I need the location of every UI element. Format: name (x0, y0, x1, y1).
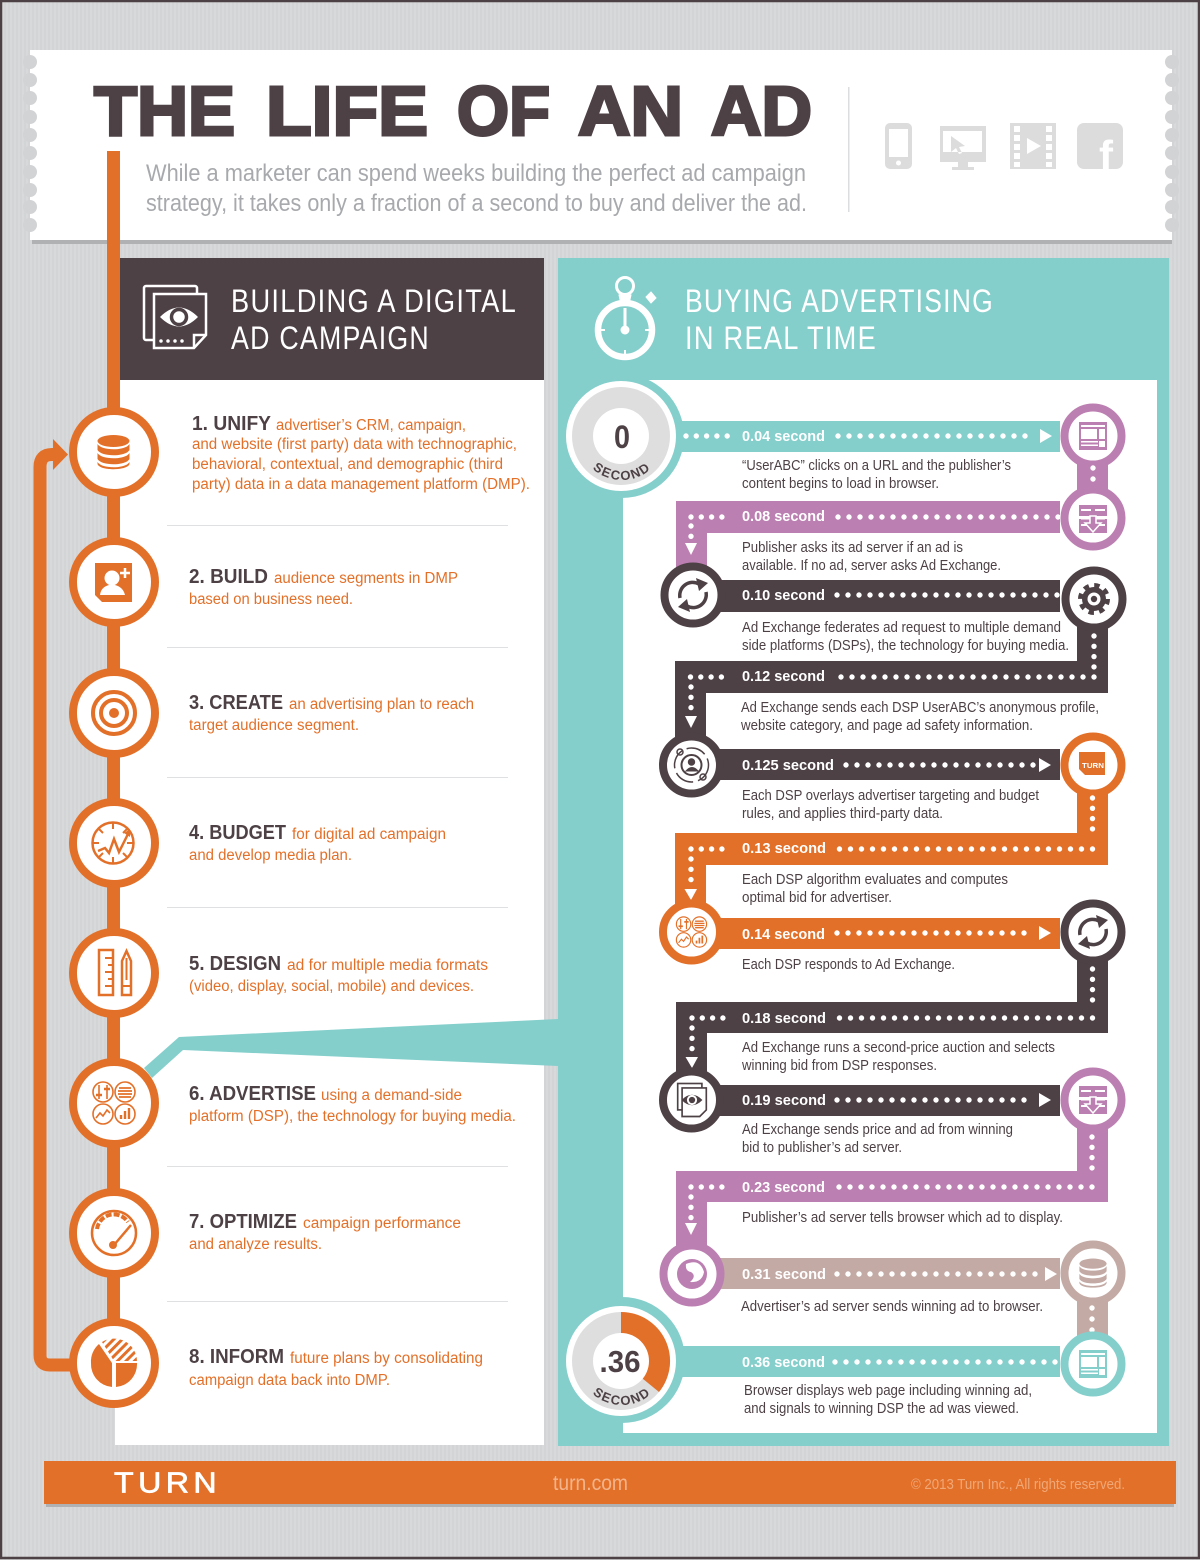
step 6 text (189, 1082, 516, 1125)
right panel: buying advertising in real time (558, 258, 1169, 1446)
step 1 text: party) data in a data management platform (DMP). (192, 476, 530, 493)
node: gear icon (1066, 570, 1122, 628)
step 0.18 second: winning bid from DSP responses. (741, 1058, 937, 1074)
step 0.13 second (684, 798, 1092, 906)
step 2 build (73, 541, 458, 623)
step 5 design (73, 932, 488, 1014)
footer logo: TURN (114, 1468, 221, 1500)
footer bar (44, 1461, 1176, 1507)
step 0.10 second (742, 587, 1069, 654)
step 2 text: based on business need. (189, 591, 353, 608)
title: THE (94, 72, 235, 150)
start clock: 0 second (566, 380, 682, 498)
end clock: .36 second: .36 (600, 1344, 640, 1379)
step 2 text (189, 565, 458, 608)
title: AD (711, 72, 812, 150)
step 8 text (189, 1345, 483, 1389)
step 0.04 second (686, 428, 1052, 492)
step 0.23 second: 0.23 second (742, 1179, 825, 1196)
node: web page with ad icon (1064, 1336, 1122, 1392)
node: ad server database icon (1064, 1244, 1122, 1331)
step 2 text: audience segments in DMP (274, 570, 458, 587)
step 4 budget (73, 802, 446, 884)
icon: database (73, 411, 155, 493)
step 0.08 second: Publisher asks its ad server if an ad is (742, 540, 963, 556)
step 1 text: and website (first party) data with technographic, (192, 436, 517, 453)
step 5 text (189, 952, 488, 995)
icon: target (73, 672, 155, 754)
step 7 optimize (73, 1192, 461, 1274)
timeline spine (107, 151, 120, 1363)
step 0.10 second: Ad Exchange federates ad request to multiple demand (742, 620, 1061, 636)
step 0.08 second: 0.08 second (742, 508, 825, 525)
step 8 text: campaign data back into DMP. (189, 1372, 390, 1389)
left panel: building a digital ad campaign (115, 258, 544, 1445)
end clock: .36 second: SECOND (594, 1388, 648, 1405)
header banner (23, 50, 1179, 244)
left panel heading: AD CAMPAIGN (231, 320, 430, 356)
node: ad server layout icon (1064, 1072, 1122, 1128)
step 0.14 second: Each DSP responds to Ad Exchange. (742, 957, 955, 973)
step 0.31 second: 0.31 second (742, 1266, 826, 1283)
end clock: .36 second (566, 1297, 684, 1423)
node: publisher page icon (1064, 408, 1122, 480)
footer url: turn.com (553, 1472, 628, 1495)
step 1 text (192, 412, 530, 493)
subtitle (146, 160, 807, 217)
step 3 text (189, 691, 474, 734)
media icons: phone, monitor, video, facebook (885, 123, 1123, 179)
icon: clock with chart line (73, 802, 155, 884)
node: DSP dashboard icon (663, 904, 720, 960)
step 0.13 second: optimal bid for advertiser. (742, 890, 892, 906)
step 0.08 second (685, 508, 1060, 574)
step 4 text: and develop media plan. (189, 847, 352, 864)
node: browser logo (664, 1246, 720, 1302)
step 5 text: (video, display, social, mobile) and devices. (189, 978, 474, 995)
step 8 inform (73, 1322, 483, 1404)
step 0.19 second: Ad Exchange sends price and ad from winning (742, 1122, 1013, 1138)
right panel heading: IN REAL TIME (685, 320, 877, 356)
step 4 text: 4. BUDGET (189, 821, 286, 844)
step 2 text: 2. BUILD (189, 565, 268, 588)
step 6 text: 6. ADVERTISE (189, 1082, 316, 1105)
step 0.12 second: 0.12 second (742, 668, 825, 685)
feedback loop arrow (40, 439, 75, 1365)
step 0.23 second: Publisher’s ad server tells browser which ad to display. (742, 1210, 1063, 1226)
node: ad server layout icon (1064, 490, 1122, 546)
step 5 text: ad for multiple media formats (287, 957, 488, 974)
step 6 text: platform (DSP), the technology for buying media. (189, 1108, 516, 1125)
start clock: 0 second: 0 (614, 419, 630, 455)
flow connectors and bars (670, 421, 1108, 1377)
step 0.23 second (685, 1137, 1092, 1235)
step 0.18 second: 0.18 second (742, 1010, 826, 1027)
step 0.18 second (686, 969, 1092, 1074)
icon: contact card (73, 541, 155, 623)
step 8 text: future plans by consolidating (290, 1350, 483, 1367)
step 6 text: using a demand-side (321, 1087, 462, 1104)
step 0.14 second: 0.14 second (742, 926, 825, 943)
node: exchange arrows icon (1064, 904, 1122, 960)
step 1 unify (73, 411, 530, 493)
step 0.08 second: available. If no ad, server asks Ad Exchange. (742, 558, 1001, 574)
step 0.125 second (742, 757, 1051, 822)
step 0.13 second: Each DSP algorithm evaluates and computes (742, 872, 1008, 888)
step 0.19 second (742, 1092, 1051, 1156)
step 5 text: 5. DESIGN (189, 952, 281, 975)
step 1 text: 1. UNIFY (192, 412, 271, 435)
step 0.13 second: 0.13 second (742, 840, 826, 857)
stopwatch icon (598, 278, 656, 357)
title: LIFE (266, 72, 428, 150)
step 8 text: 8. INFORM (189, 1345, 284, 1368)
step 7 text: campaign performance (303, 1215, 461, 1232)
icon: dashboard circles (73, 1062, 155, 1144)
step 0.04 second: content begins to load in browser. (742, 476, 939, 492)
step 0.10 second: side platforms (DSPs), the technology for buying media. (742, 638, 1069, 654)
step 0.125 second: 0.125 second (742, 757, 834, 774)
step 0.125 second: Each DSP overlays advertiser targeting and budget (742, 788, 1039, 804)
icon: ruler and pencil (73, 932, 155, 1014)
node: document eye icon (663, 1072, 720, 1128)
step 3 create (73, 672, 474, 754)
step 0.31 second (741, 1266, 1057, 1315)
subtitle: While a marketer can spend weeks building the perfect ad campaign (146, 160, 806, 187)
step 4 text (189, 821, 446, 864)
icon: speedometer (73, 1192, 155, 1274)
node: Turn logo (1064, 736, 1122, 794)
title: AN (578, 72, 683, 150)
step 0.31 second: Advertiser’s ad server sends winning ad to browser. (741, 1299, 1043, 1315)
step 0.36 second: 0.36 second (742, 1354, 825, 1371)
step 0.10 second: 0.10 second (742, 587, 825, 604)
left panel heading: BUILDING A DIGITAL (231, 283, 517, 319)
step 0.12 second: website category, and page ad safety information. (740, 718, 1033, 734)
step 3 text: an advertising plan to reach (289, 696, 474, 713)
step 1 text: advertiser’s CRM, campaign, (276, 417, 466, 434)
step 3 text: 3. CREATE (189, 691, 283, 714)
left panel heading (231, 283, 517, 356)
icon: pie chart (73, 1322, 155, 1404)
step 0.12 second: Ad Exchange sends each DSP UserABC’s anonymous profile, (741, 700, 1099, 716)
right panel heading (685, 283, 994, 356)
step 7 text: and analyze results. (189, 1236, 322, 1253)
node: targeting rings icon (663, 736, 720, 794)
step 3 text: target audience segment. (189, 717, 359, 734)
step 0.12 second (685, 636, 1099, 734)
callout connector from step 6 to right panel (144, 1019, 558, 1078)
left panel icon: layered documents with eye (144, 286, 206, 348)
start clock: 0 second: SECOND (594, 463, 648, 480)
step 0.36 second (742, 1354, 1060, 1417)
title: OF (457, 72, 550, 150)
step 0.125 second: rules, and applies third-party data. (742, 806, 943, 822)
step 7 text (189, 1210, 461, 1253)
step 4 text: for digital ad campaign (292, 826, 446, 843)
step 0.04 second: “UserABC” clicks on a URL and the publisher’s (742, 458, 1011, 474)
step 0.18 second: Ad Exchange runs a second-price auction and selects (742, 1040, 1055, 1056)
step 0.14 second (742, 926, 1051, 973)
step 0.19 second: 0.19 second (742, 1092, 826, 1109)
step 0.36 second: and signals to winning DSP the ad was viewed. (744, 1401, 1019, 1417)
right panel heading: BUYING ADVERTISING (685, 283, 994, 319)
title (94, 72, 812, 150)
step 1 text: behavioral, contextual, and demographic (third (192, 456, 503, 473)
node: exchange arrows icon (664, 566, 722, 624)
node: Turn logo: TURN (1082, 761, 1104, 770)
footer copyright: © 2013 Turn Inc., All rights reserved. (911, 1477, 1125, 1493)
step 6 advertise (73, 1062, 516, 1144)
media icons: phone, monitor, video, facebook: f (1099, 132, 1114, 179)
subtitle: strategy, it takes only a fraction of a second to buy and deliver the ad. (146, 190, 807, 217)
step 0.04 second: 0.04 second (742, 428, 825, 445)
step 7 text: 7. OPTIMIZE (189, 1210, 297, 1233)
step 0.36 second: Browser displays web page including winning ad, (744, 1383, 1032, 1399)
step 0.19 second: bid to publisher’s ad server. (742, 1140, 902, 1156)
